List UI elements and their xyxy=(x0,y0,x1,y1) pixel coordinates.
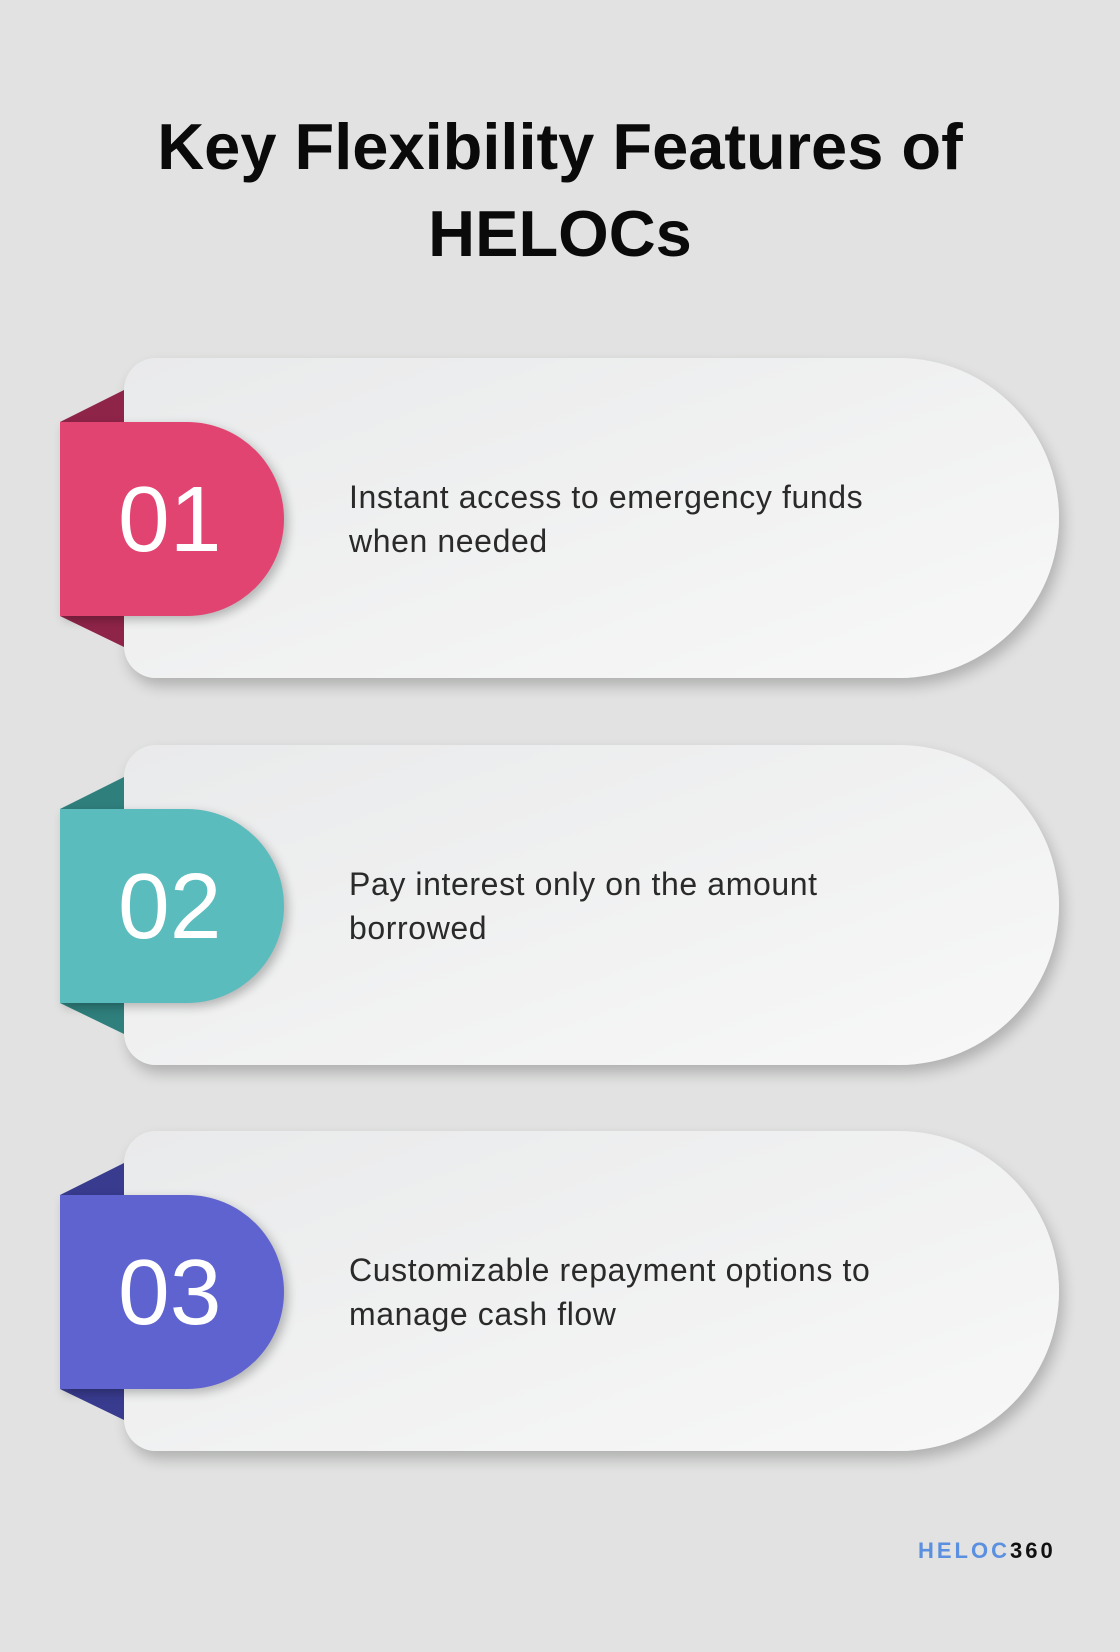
badge 02: 02 xyxy=(118,854,221,958)
text 03 xyxy=(349,1252,870,1332)
fold 02 xyxy=(60,777,124,1034)
text 01 xyxy=(349,479,863,559)
panel: item 03 xyxy=(59,1131,1069,1466)
card 03 xyxy=(124,1131,1059,1451)
fold 03 xyxy=(60,1163,124,1420)
panel: item 02 xyxy=(59,745,1069,1080)
badge 03 xyxy=(60,1195,284,1389)
text 01: Instant access to emergency funds xyxy=(349,479,863,515)
title xyxy=(157,110,963,270)
text 02: Pay interest only on the amount xyxy=(349,866,818,902)
text 03: manage cash flow xyxy=(349,1296,617,1332)
logo: HELOC360 xyxy=(918,1538,1056,1563)
badge 03: 03 xyxy=(118,1240,221,1344)
text 02 xyxy=(349,866,818,946)
badge 02 xyxy=(60,809,284,1003)
title: HELOCs xyxy=(428,197,692,270)
text 01: when needed xyxy=(349,523,548,559)
title: Key Flexibility Features of xyxy=(157,110,963,183)
badge 01 xyxy=(60,422,284,616)
fold 01 xyxy=(60,390,124,647)
card 01 xyxy=(124,358,1059,678)
panel: item 01 xyxy=(59,358,1069,692)
text 03: Customizable repayment options to xyxy=(349,1252,870,1288)
text 02: borrowed xyxy=(349,910,487,946)
badge 01: 01 xyxy=(118,467,221,571)
card 02 xyxy=(124,745,1059,1065)
